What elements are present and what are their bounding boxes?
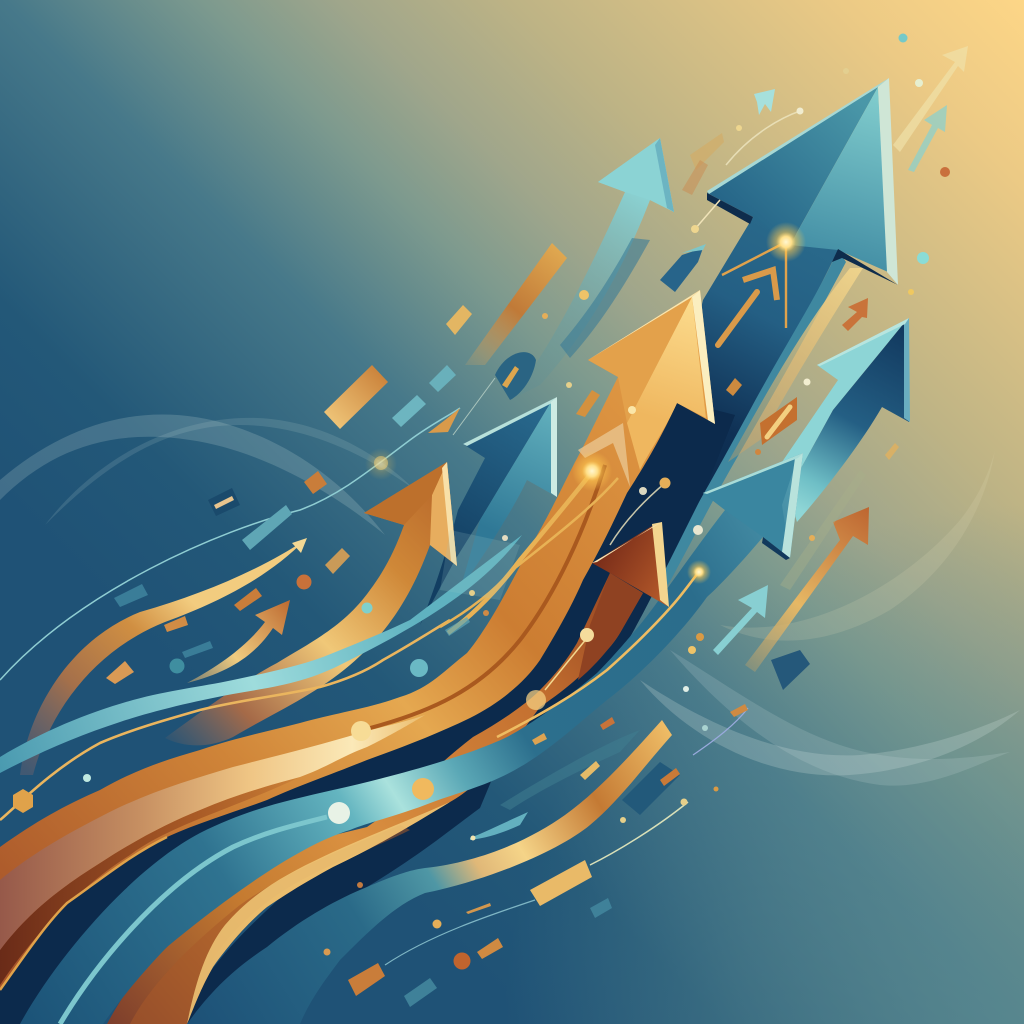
small arrow: pale line bbox=[292, 538, 307, 553]
gold bars and confetti bbox=[106, 133, 899, 1007]
small arrow: teal top right bbox=[908, 105, 947, 172]
gold head facets bbox=[588, 297, 692, 423]
small arrow: orange near big arrow bbox=[842, 298, 868, 331]
arrow: large blue top bbox=[610, 78, 898, 610]
small arrow: orange upper mid bbox=[428, 408, 460, 433]
gold centre stripe bbox=[370, 465, 605, 728]
ribbon: lower blue turning gold bbox=[187, 720, 672, 1024]
small arrow: orange right bbox=[745, 507, 869, 672]
gold band beside big arrow bbox=[728, 268, 863, 462]
arrow: blue lower with teal ribbon bbox=[20, 453, 803, 1024]
gold ribbon bright centre bbox=[0, 715, 425, 950]
arrow: mid blue bbox=[420, 397, 557, 625]
arrow: orange left with ribbon bbox=[165, 462, 457, 745]
arrow head: brown bbox=[578, 522, 669, 680]
arrow: golden central with ribbon bbox=[0, 290, 715, 990]
thin lines with nodes bbox=[0, 111, 800, 965]
diamond badge bbox=[760, 397, 797, 445]
small arrow: gold on big arrow bbox=[718, 270, 777, 345]
ribbon: orange with brown arrow shaft bbox=[107, 573, 643, 1024]
small arrow: orange left bbox=[187, 600, 290, 683]
line: teal ribbon bbox=[0, 535, 522, 773]
glowing sparkles bbox=[365, 222, 806, 584]
small arrow: teal lower bbox=[713, 585, 768, 655]
small arrow: teal top bbox=[754, 89, 775, 115]
small arrow: pale top right bbox=[893, 46, 968, 152]
stripe: light teal highlight bbox=[60, 817, 327, 1024]
ribbon: navy under orange bbox=[180, 760, 500, 1024]
arrow: right teal-blue bbox=[782, 318, 910, 522]
translucent wave swooshes bbox=[0, 414, 1020, 786]
arc: orange swoosh left bbox=[20, 540, 305, 775]
arrow: pale teal upper bbox=[510, 138, 674, 400]
ribbon: dark navy base bbox=[0, 400, 735, 1024]
gold ribbon lower shadow band bbox=[0, 777, 300, 985]
